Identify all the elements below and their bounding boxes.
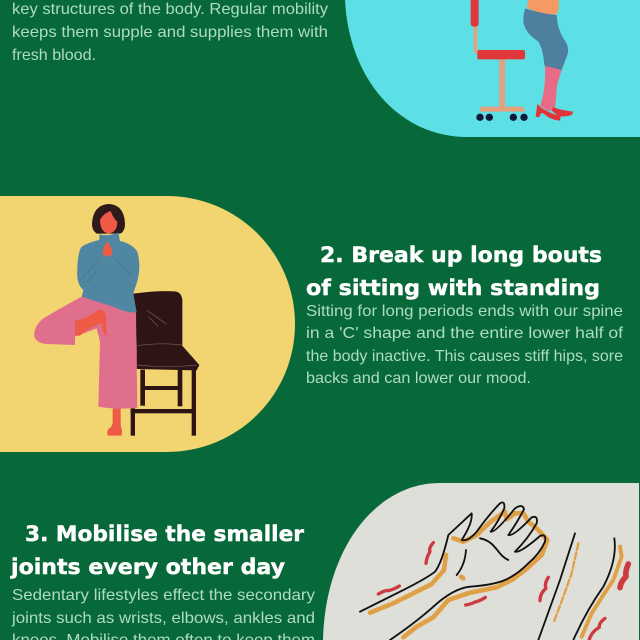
orange joint highlights [370, 512, 622, 637]
black arm outlines [360, 502, 615, 640]
icon: office chair [471, 0, 528, 121]
heading: section 2 [306, 243, 602, 300]
text block: intro continuation: key structures of the body. Regular mobility [12, 1, 328, 18]
icon: standing woman legs [523, 0, 573, 121]
text block: intro continuation: keeps them supple and supplies them with [12, 24, 328, 41]
text block: section 2 body: in a 'C' shape and the entire lower half of [306, 325, 624, 342]
panel: yellow illustration [0, 196, 295, 452]
panel: cyan illustration [345, 0, 640, 137]
text block: intro continuation [12, 1, 328, 64]
heading: section 2: of sitting with standing [306, 276, 600, 300]
icon: woman balancing on one leg [34, 204, 139, 436]
text block: section 2 body: backs and can lower our mood. [306, 370, 531, 387]
heading: section 3 [10, 522, 305, 579]
text block: section 2 body [306, 303, 624, 387]
panel: grey illustration [323, 483, 639, 640]
heading: section 2: 2. Break up long bouts [320, 243, 602, 267]
text block: section 3 body: joints such as wrists, elbows, ankles and [11, 610, 315, 627]
text block: section 3 body [11, 587, 315, 640]
red squiggles [378, 543, 628, 639]
text block: section 2 body: the body inactive. This causes stiff hips, sore [306, 348, 623, 365]
icon: arm and hand joints [360, 502, 628, 640]
text block: section 3 body: Sedentary lifestyles effect the secondary [12, 587, 315, 604]
heading: section 3: 3. Mobilise the smaller [25, 522, 305, 546]
heading: section 3: joints every other day [10, 555, 285, 579]
icon: dark chair [131, 291, 199, 436]
text block: intro continuation: fresh blood. [12, 47, 96, 64]
text block: section 2 body: Sitting for long periods ends with our spine [306, 303, 623, 320]
